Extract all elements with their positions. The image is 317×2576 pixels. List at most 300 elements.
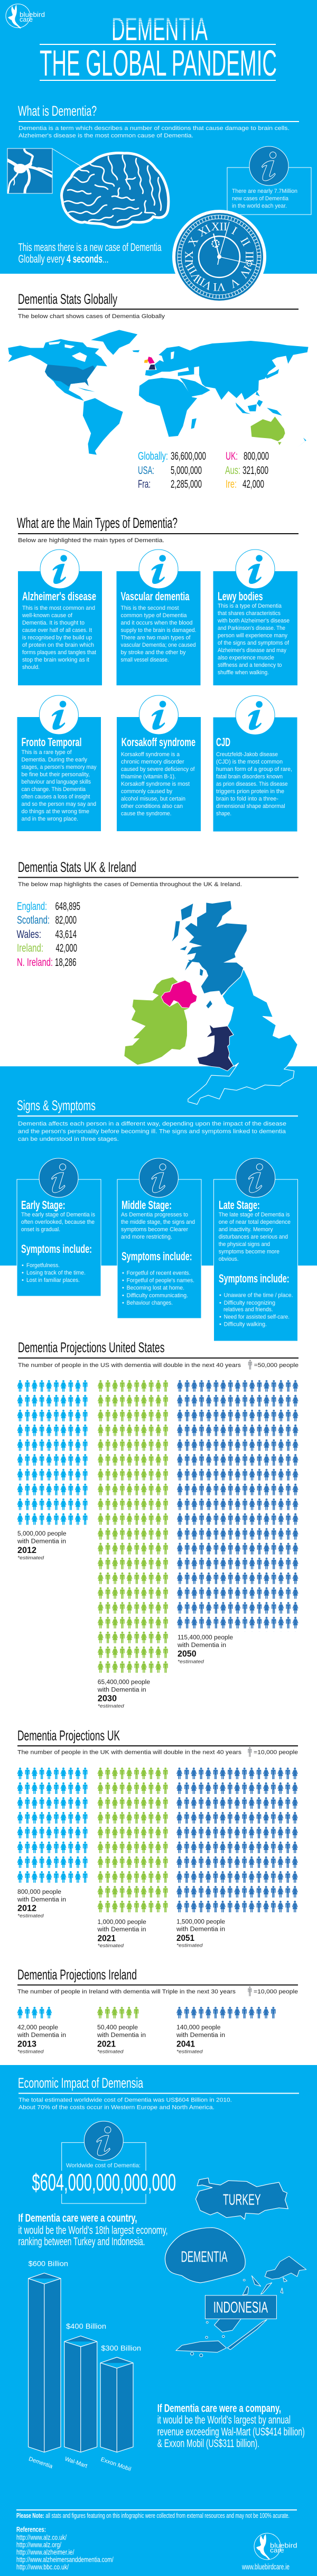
panel: late stage: Unaware of the time / place. (224, 1292, 293, 1299)
icon: info circle (249, 146, 288, 185)
pictogram: US 2030 (98, 1380, 169, 1676)
text: if dementia were a country: If Dementia care were a country, (18, 2212, 137, 2224)
map highlight: France (148, 365, 155, 369)
panel: Vascular dementia: by stroke and the other by (120, 649, 186, 656)
map region: Isle of Man (206, 1000, 212, 1008)
panel: late stage: relatives and friends. (223, 1307, 273, 1313)
panel: Alzheimer's disease: should. (22, 664, 40, 671)
panel: early stage: Early Stage: (21, 1198, 66, 1212)
panel: Lewy bodies: person will experience many (218, 633, 287, 639)
text: signs and symptoms intro: Dementia affects each person in a different way, depending upon the impact of the disease (18, 1121, 286, 1127)
panel: Fronto Temporal: Fronto Temporal (21, 736, 81, 749)
panel: late stage: The late stage of Dementia is (219, 1212, 290, 1218)
panel: early stage: The early stage of Dementia is (21, 1212, 95, 1218)
panel: Korsakoff syndrome: Korsakoff syndrome is a (121, 751, 180, 758)
label: UK 2021 (97, 1919, 146, 1949)
map: Indonesia: INDONESIA (213, 2299, 268, 2317)
legend: UK and Ireland numbers: 18,286 (55, 956, 76, 969)
label: UK 2012: *estimated (17, 1913, 44, 1919)
panel: CJD: triggers prion protein in the (216, 788, 284, 795)
panel: Fronto Temporal (17, 695, 101, 831)
panel: middle stage: Middle Stage: (122, 1198, 172, 1212)
icon: clock: VII (194, 273, 215, 293)
panel: Korsakoff syndrome: Korsakoff syndrome is most (121, 781, 190, 787)
panel: Alzheimer's disease: cause over half of all cases. It (22, 627, 92, 634)
label: US 2012: *estimated (17, 1555, 44, 1561)
panel: middle stage: • (122, 1292, 124, 1299)
shape: Dementia country (165, 2228, 245, 2283)
panel: Lewy bodies: This is a type of Dementia (218, 603, 282, 609)
panel: Lewy bodies (213, 550, 297, 685)
legend: UK and Ireland numbers: Wales: (17, 928, 41, 941)
text: signs and symptoms intro: and the person's personality before becoming ill. The signs and symptoms linked to dementia (18, 1129, 286, 1135)
text: if dementia were a company: & Exxon Mobil (US$311 billion). (157, 2438, 259, 2450)
background: signs and symptoms blue band (0, 1066, 317, 1266)
legend: UK and Ireland numbers (17, 900, 80, 969)
shape: Dementia country: DEMENTIA (181, 2248, 228, 2265)
bar: Dementia $600 Billion (28, 2259, 68, 2470)
text: new case every 4 seconds: This means there is a new case of Dementia (18, 241, 162, 254)
text: 7.7 million: new cases of Dementia (232, 196, 289, 202)
panel: late stage: and inactivity. Memory (219, 1226, 273, 1233)
panel: late stage (213, 1158, 298, 1341)
panel: early stage: Losing track of the time. (26, 1270, 86, 1276)
bar: Wal-Mart $400 Billion: Wal-Mart (64, 2456, 88, 2469)
text: signs and symptoms intro: can be understood in three stages. (18, 1136, 119, 1142)
text: dementia definition: Alzheimer's disease is the most common cause of Dementia. (18, 133, 193, 139)
panel: CJD: (CJD) is the most common (216, 759, 283, 765)
panel: middle stage: • (122, 1270, 124, 1277)
panel: CJD: CJD (216, 736, 230, 749)
panel: middle stage: Behaviour changes. (127, 1300, 173, 1306)
panel: CJD: brain to fold into a three- (216, 796, 278, 802)
panel: Vascular dementia: small vessel disease. (120, 657, 169, 663)
logo: bluebird care: care (20, 15, 33, 23)
label: Ireland 2013: with Dementia in (17, 2032, 66, 2039)
panel: Alzheimer's disease: well-known cause of (22, 612, 73, 619)
panel: Korsakoff syndrome: caused by severe deficiency of (121, 766, 195, 773)
icon: clock (174, 211, 265, 302)
label: Ireland 2013: 2013 (17, 2039, 36, 2049)
label: Ireland 2041: with Dementia in (176, 2032, 225, 2039)
section: economic impact heading: Economic Impact of Demensia (18, 2075, 144, 2091)
icon: brain (61, 153, 169, 227)
panel: Alzheimer's disease: is recognised by the build up (22, 635, 92, 641)
legend: global case numbers: 42,000 (243, 478, 264, 490)
logo: footer bluebird care: bluebird (270, 2542, 297, 2550)
panel: middle stage: Becoming lost at home. (127, 1285, 184, 1291)
callout: new cases per year (227, 146, 311, 215)
legend: global case numbers: 5,000,000 (171, 464, 202, 477)
text: 7.7 million (232, 188, 297, 209)
world map (8, 330, 309, 455)
text: chart intro: The below chart shows cases of Dementia Globally (18, 313, 165, 320)
panel: late stage: • (219, 1292, 221, 1299)
label: UK 2021: 1,000,000 people (97, 1919, 146, 1926)
background: economic impact blue band (0, 2065, 317, 2576)
panel: late stage: the physical signs and (219, 1241, 270, 1248)
label: US 2050: 2050 (178, 1649, 197, 1659)
panel: Lewy bodies: with both Alzheimer's disease (217, 618, 290, 624)
panel: middle stage: and more restricting. (121, 1234, 172, 1240)
panel: Lewy bodies: and Parkinson's disease. The (218, 625, 285, 631)
panel: early stage: • (22, 1277, 24, 1284)
text: main types intro: Below are highlighted the main types of Dementia. (18, 537, 164, 544)
panel: Fronto Temporal: do things at the wrong time (21, 808, 89, 815)
logo: footer bluebird care (254, 2533, 297, 2560)
panel: Vascular dementia: supply to the brain is damaged. (120, 627, 197, 634)
legend: person equals 10,000 people Ireland (248, 1986, 298, 1996)
text: US projection intro: The number of people in the US with dementia will double in the next 40 years (18, 1362, 241, 1369)
legend: person equals 50,000 people (248, 1360, 299, 1370)
label: Ireland 2013: *estimated (17, 2049, 44, 2055)
panel: middle stage: • (122, 1300, 124, 1306)
panel: early stage: onset is gradual. (21, 1226, 60, 1233)
UK and Ireland map (124, 901, 297, 1104)
logo: bluebird care: bluebird (20, 11, 45, 18)
text: signs and symptoms intro (18, 1121, 286, 1142)
label: US 2050: 115,400,000 people (178, 1635, 233, 1641)
title: DEMENTIA (111, 11, 208, 47)
text: economic impact intro (18, 2097, 232, 2111)
bar: Dementia $600 Billion: Dementia (28, 2456, 54, 2470)
panel: early stage: often overlooked, because the (21, 1219, 95, 1225)
callout: worldwide cost: Worldwide cost of Dementia: (66, 2162, 141, 2169)
panel: middle stage: As Dementia progresses to (121, 1212, 188, 1218)
icon: clock: III (243, 251, 256, 263)
panel: Fronto Temporal: behaviour and language skills (21, 779, 91, 785)
label: Ireland 2021 (97, 2025, 146, 2055)
legend: UK and Ireland numbers: Scotland: (17, 914, 50, 926)
panel: Korsakoff syndrome: cause the syndrome. (121, 811, 171, 817)
map region: Scotland (172, 901, 247, 995)
label: Ireland 2021: 2021 (97, 2039, 116, 2049)
map highlight: Australia (250, 416, 285, 445)
label: US 2050 (177, 1635, 233, 1664)
panel: Alzheimer's disease: This is the most common and (22, 605, 95, 611)
panel: Lewy bodies: shuffle when walking. (218, 669, 269, 676)
label: US 2030 (97, 1679, 150, 1709)
bar: Wal-Mart $400 Billion (64, 2322, 106, 2469)
panel: middle stage: Symptoms include: (122, 1250, 192, 1263)
label: UK 2051: *estimated (176, 1942, 203, 1949)
panel: Korsakoff syndrome (117, 695, 201, 831)
map region: Northern Ireland (161, 980, 197, 1008)
label: Ireland 2021: with Dementia in (97, 2032, 146, 2039)
label: US 2012: 5,000,000 people (17, 1531, 67, 1537)
legend: UK and Ireland numbers: N. Ireland: (17, 956, 53, 969)
map highlight: Ireland (144, 359, 148, 363)
panel: Vascular dementia: Vascular dementia (120, 590, 190, 603)
panel: Fronto Temporal: This is a rare type of (21, 749, 72, 756)
panel: late stage: • (219, 1321, 221, 1327)
panel: CJD: shape. (216, 811, 231, 817)
bar: Dementia $600 Billion: $600 Billion (29, 2259, 68, 2268)
legend: global case numbers: 36,600,000 (171, 450, 206, 462)
section: main types heading: What are the Main Types of Dementia? (17, 515, 178, 531)
map highlight: UK (147, 357, 155, 364)
map: Turkey (195, 2178, 288, 2219)
pictogram: US 2050 (177, 1380, 300, 1632)
icon: clock: I (229, 224, 239, 237)
panel: late stage: symptoms become more (219, 1249, 279, 1255)
panel: middle stage: Forgetful of people's names. (127, 1278, 194, 1284)
panel: early stage (17, 1158, 101, 1296)
panel: late stage: • (219, 1300, 221, 1306)
legend: person equals 10,000 people UK: =10,000 people (254, 1749, 298, 1755)
text: 7.7 million: in the world each year. (232, 203, 287, 209)
legend: UK and Ireland numbers: Ireland: (17, 942, 43, 954)
icon: clock: XI (195, 222, 213, 239)
panel: middle stage: symptoms become Clearer (121, 1226, 188, 1233)
logo: footer bluebird care: care (270, 2546, 284, 2554)
panel: Alzheimer's disease: forms plaques and tangles that (22, 649, 96, 656)
label: UK 2021: 2021 (97, 1933, 116, 1943)
text: references: http://www.alz.co.uk/ (16, 2533, 67, 2542)
text: references: http://www.alz.org/ (16, 2541, 61, 2549)
panel: early stage: • (22, 1270, 24, 1276)
label: US 2030: *estimated (98, 1704, 124, 1709)
legend: global case numbers: Globally: (138, 450, 168, 462)
panel: Vascular dementia: vascular Dementia; one caused (120, 642, 195, 648)
label: UK 2051: 1,500,000 people (176, 1919, 225, 1926)
panel: middle stage: the middle stage, the signs and (121, 1219, 195, 1225)
section: projections United States heading: Dementia Projections United States (18, 1340, 165, 1355)
label: UK 2012 (17, 1889, 66, 1919)
icon: clock: IX (182, 250, 195, 263)
label: Ireland 2021: 50,400 people (97, 2025, 138, 2031)
legend: global case numbers: Aus: (225, 464, 240, 477)
pictogram: Ireland 2041 (176, 2007, 276, 2019)
legend: global case numbers: Fra: (138, 478, 151, 490)
section: projections Ireland heading: Dementia Projections Ireland (17, 1967, 137, 1983)
panel: Alzheimer's disease: Alzheimer's disease (22, 590, 96, 603)
panel: late stage: disturbances are serious and (219, 1234, 288, 1240)
panel: Alzheimer's disease (18, 550, 102, 685)
legend: global case numbers (138, 450, 269, 490)
panel: CJD: fatal brain disorders known (216, 774, 283, 780)
panel: late stage: Difficulty recognizing (224, 1300, 275, 1306)
pictogram: Ireland 2013 (17, 2007, 53, 2019)
bar: Exxon Mobil $300 Billion: Exxon Mobil (100, 2456, 132, 2472)
panel: late stage: Difficulty walking. (224, 1321, 267, 1327)
panel: Korsakoff syndrome: other conditions also can (121, 803, 183, 810)
panel: CJD (213, 695, 297, 832)
panel: early stage: Lost in familiar places. (26, 1277, 80, 1284)
panel: Lewy bodies: stiffness and a tendency to (218, 662, 282, 668)
section: what is dementia heading: What is Dementia? (18, 103, 97, 119)
label: Ireland 2041: 140,000 people (176, 2025, 221, 2031)
icon: clock: IV (237, 263, 254, 281)
label: UK 2021: with Dementia in (97, 1927, 146, 1933)
panel: early stage: Symptoms include: (21, 1242, 92, 1256)
text: if dementia were a company (157, 2402, 305, 2450)
panel: Korsakoff syndrome: chronic memory disorder (121, 759, 184, 765)
icon: neuron inset (7, 148, 80, 193)
text: UK projection intro: The number of people in the UK with dementia will double in the next 40 years (17, 1749, 242, 1755)
panel: CJD: as prion diseases. This disease (216, 781, 288, 787)
label: Ireland 2041: *estimated (176, 2049, 203, 2055)
panel: early stage: • (22, 1262, 24, 1269)
background: top blue band (0, 0, 317, 274)
bar: Exxon Mobil $300 Billion (100, 2344, 141, 2472)
label: UK 2012: with Dementia in (17, 1896, 66, 1903)
legend: person equals 10,000 people UK (248, 1747, 298, 1757)
text: economic impact intro: About 70% of the costs occur in Western Europe and North America. (18, 2105, 215, 2111)
map: Turkey: TURKEY (223, 2191, 261, 2208)
logo: bluebird care (6, 4, 45, 29)
panel: CJD: dimensional shape abnormal (216, 803, 285, 810)
icon: clock: II (238, 235, 253, 248)
legend: UK and Ireland numbers: 42,000 (56, 942, 77, 954)
icon: clock: VIII (182, 260, 203, 284)
panel: early stage: Forgetfulness. (26, 1262, 60, 1269)
label: Ireland 2021: *estimated (97, 2049, 124, 2055)
panel: Fronto Temporal: stages, a person's memory may (21, 764, 97, 770)
callout: worldwide cost (32, 2121, 176, 2203)
label: US 2030: 65,400,000 people (98, 1679, 150, 1686)
label: UK 2012: 2012 (17, 1903, 36, 1913)
label: US 2030: with Dementia in (97, 1687, 146, 1694)
panel: Korsakoff syndrome: commonly caused by (121, 788, 172, 795)
label: UK 2012: 800,000 people (17, 1889, 61, 1895)
text: new case every 4 seconds: Globally every 4 seconds... (18, 253, 109, 265)
map region: Ireland (124, 977, 189, 1065)
label: Ireland 2013: 42,000 people (17, 2025, 58, 2031)
panel: CJD: Creutzfeldt-Jakob disease (216, 751, 278, 758)
text: references: http://www.bbc.co.uk/ (16, 2563, 69, 2571)
pictogram: Ireland 2021 (97, 2007, 139, 2019)
text: if dementia were a country (18, 2212, 168, 2248)
text: new case every 4 seconds (18, 241, 162, 265)
panel: middle stage: Forgetful of recent events. (127, 1270, 190, 1277)
panel: Alzheimer's disease: stop the brain working as it (22, 657, 89, 663)
text: references: http://www.alzheimer.ie/ (16, 2548, 74, 2556)
label: US 2050: with Dementia in (177, 1642, 226, 1649)
panel: Alzheimer's disease: Dementia. It is thought to (22, 620, 85, 626)
text: economic impact intro: The total estimated worldwide cost of Dementia was US$604 Billion in 2010. (18, 2097, 232, 2103)
panel: Fronto Temporal: and so the person may say and (21, 801, 96, 807)
panel: Fronto Temporal: often causes a loss of insight (21, 794, 90, 800)
icon: clock: XII (211, 220, 227, 233)
map region: Wales (197, 1024, 234, 1071)
pictogram: UK 2012 (17, 1768, 88, 1886)
legend: UK and Ireland numbers: 43,614 (55, 928, 77, 941)
panel: late stage: obvious. (219, 1256, 239, 1262)
label: Ireland 2013 (17, 2025, 66, 2055)
bar chart: revenue comparison (28, 2259, 141, 2472)
text: references: References: (16, 2525, 46, 2534)
legend: person equals 10,000 people Ireland: =10,000 people (254, 1989, 298, 1995)
panel: late stage: Late Stage: (219, 1198, 260, 1212)
panel: Fronto Temporal: be fine but their personality, (21, 771, 90, 778)
text: Ireland projection intro: The number of people in Ireland with dementia will Triple in the next 30 years (17, 1989, 236, 1995)
panel: Korsakoff syndrome: alcohol misuse, but certain (121, 796, 185, 802)
panel: Vascular dementia: This is the second most (120, 605, 179, 611)
panel: Fronto Temporal: Dementia. During the early (21, 757, 87, 763)
section: projections UK heading: Dementia Projections UK (17, 1727, 120, 1743)
legend: global case numbers: Ire: (226, 478, 237, 490)
map: Indonesia (176, 2256, 306, 2357)
label: US 2030: 2030 (98, 1693, 117, 1703)
panel: late stage: one of near total dependence (219, 1219, 291, 1225)
label: UK 2051 (176, 1919, 225, 1949)
panel: middle stage: • (122, 1285, 124, 1291)
text: dementia definition (18, 125, 290, 139)
panel: Korsakoff syndrome: thiamine (vitamin B-1). (121, 774, 176, 780)
text: UK map intro: The below map highlights the cases of Dementia throughout the UK & Ireland. (18, 881, 242, 888)
legend: global case numbers: USA: (138, 464, 154, 477)
panel: Vascular dementia: There are two main types of (120, 635, 191, 641)
panel: Lewy bodies: that shares characteristics (218, 610, 281, 617)
text: references (16, 2525, 114, 2571)
legend: UK and Ireland numbers: 82,000 (55, 914, 77, 926)
section: stats UK and Ireland heading: Dementia Stats UK & Ireland (18, 859, 136, 875)
panel: Lewy bodies: also experience muscle (218, 655, 274, 661)
callout: worldwide cost: $604,000,000,000,000 (32, 2169, 176, 2196)
pictogram: UK 2021 (97, 1768, 168, 1915)
panel: middle stage (117, 1158, 201, 1318)
label: Ireland 2041: 2041 (176, 2039, 195, 2049)
text: 7.7 million: There are nearly 7.7Million (232, 188, 297, 194)
panel: Fronto Temporal: can change. This Dementia (21, 786, 86, 793)
icon: clock: X (185, 235, 201, 248)
text: website: www.bluebirdcare.ie (241, 2563, 290, 2572)
panel: Lewy bodies: Lewy bodies (218, 590, 263, 603)
panel: CJD: human form of a group of rare, (216, 766, 292, 773)
legend: person equals 50,000 people: =50,000 people (254, 1362, 299, 1369)
pictogram: US 2012 (17, 1380, 88, 1528)
panel: Lewy bodies: of the signs and symptoms of (218, 640, 290, 646)
legend: UK and Ireland numbers: 648,895 (55, 900, 80, 913)
legend: global case numbers: 321,600 (243, 464, 268, 477)
bar: Wal-Mart $400 Billion: $400 Billion (66, 2322, 106, 2330)
text: if dementia were a country: it would be the World's 18th largest economy, (18, 2224, 168, 2236)
icon: clock: VI (213, 281, 226, 294)
label: US 2050: *estimated (178, 1659, 204, 1664)
panel: Alzheimer's disease: of protein on the brain which (22, 642, 94, 648)
text: dementia definition: Dementia is a term which describes a number of conditions that cause damage to brain cells. (18, 125, 290, 132)
map highlight: USA (45, 365, 95, 387)
section: signs and symptoms heading: Signs & Symptoms (17, 1098, 96, 1113)
panel: middle stage: • (122, 1278, 124, 1284)
label: US 2012: 2012 (17, 1545, 36, 1555)
legend: global case numbers: 800,000 (244, 450, 269, 462)
title (40, 11, 277, 83)
legend: global case numbers: 2,285,000 (171, 478, 202, 490)
label: US 2012 (17, 1531, 67, 1561)
legend: UK and Ireland numbers: England: (17, 900, 47, 913)
pictogram: UK 2051 (176, 1768, 299, 1915)
label: Ireland 2041 (176, 2025, 225, 2055)
panel: Lewy bodies: Alzheimer's disease and may (218, 647, 286, 654)
label: US 2012: with Dementia in (17, 1539, 66, 1545)
panel: Vascular dementia (116, 550, 201, 685)
label: UK 2051: 2051 (176, 1933, 194, 1943)
panel: middle stage: Difficulty communicating. (127, 1292, 188, 1299)
panel: Vascular dementia: and it occurs when the blood (120, 620, 192, 626)
legend: global case numbers: UK: (226, 450, 238, 462)
label: UK 2051: with Dementia in (176, 1927, 225, 1933)
text: if dementia were a country: ranking between Turkey and Indonesia. (18, 2236, 145, 2248)
bar: Exxon Mobil $300 Billion: $300 Billion (101, 2344, 141, 2352)
map region: England (188, 969, 297, 1104)
panel: Fronto Temporal: and in the wrong place. (21, 816, 78, 822)
panel: late stage: • (219, 1314, 221, 1320)
section: dementia stats globally heading: Dementia Stats Globally (18, 291, 117, 307)
panel: Korsakoff syndrome: Korsakoff syndrome (122, 736, 195, 749)
label: UK 2021: *estimated (97, 1943, 124, 1949)
